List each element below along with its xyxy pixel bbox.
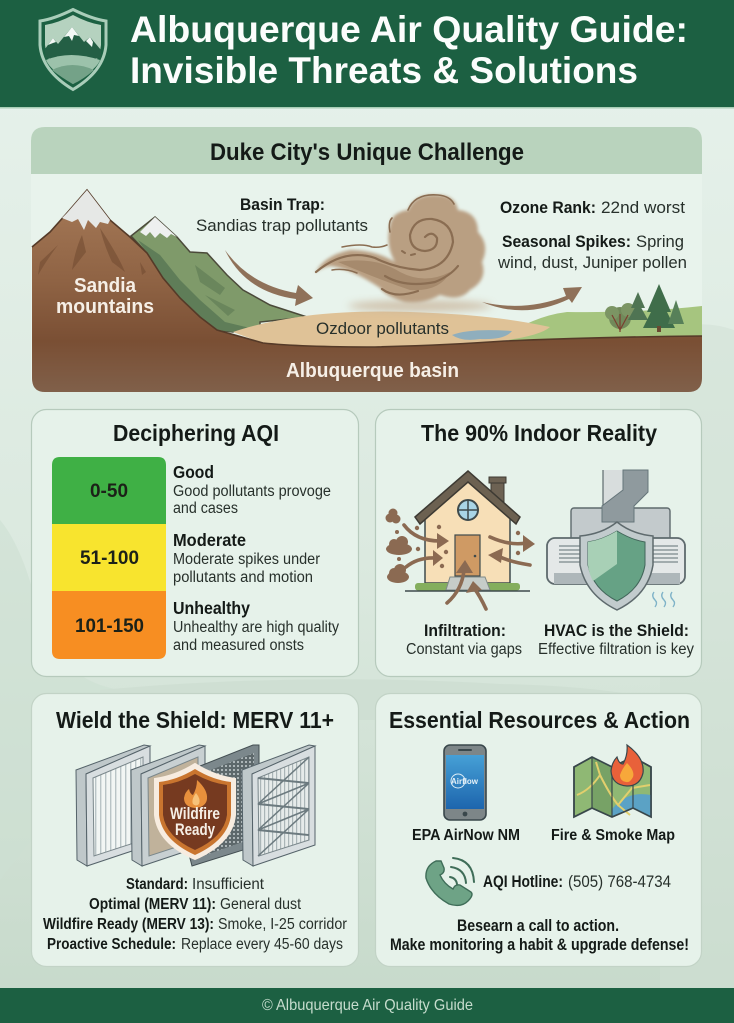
AQI description: Unhealthy: and measured onsts xyxy=(173,637,304,654)
icon: dust cloud xyxy=(315,195,492,312)
AQI description: Good: Good xyxy=(173,462,214,482)
icon: phone with AirNow: Airflow xyxy=(451,777,479,786)
caption: Infiltration: Constant via gaps xyxy=(406,641,522,658)
panel: Deciphering AQI xyxy=(32,410,358,676)
heading: Duke City's Unique Challenge: Duke City's Unique Challenge xyxy=(210,139,524,166)
caption: HVAC is the Shield xyxy=(538,621,694,658)
text: call to action xyxy=(390,917,689,954)
filter: lattice frame xyxy=(242,745,315,866)
heading: Deciphering AQI: Deciphering AQI xyxy=(113,420,279,446)
label: Fire & Smoke Map: Fire & Smoke Map xyxy=(551,827,675,844)
panel: Duke City's unique challenge xyxy=(31,127,702,392)
icon: fire and smoke map xyxy=(574,745,651,817)
badge: Wildfire Ready shield xyxy=(155,764,235,859)
AQI description: Moderate xyxy=(173,530,320,586)
AQI description: Good xyxy=(173,462,331,517)
label: Sandia mountains: mountains xyxy=(56,296,154,318)
list: filter ratings: Insufficient xyxy=(192,876,265,893)
filter: carbon mesh xyxy=(186,745,259,866)
AQI scale bar: 101-150 xyxy=(75,616,144,637)
text: Ozone Rank and Seasonal Spikes: wind, dust, Juniper pollen xyxy=(497,253,687,272)
AQI description: Good: Good pollutants provoge xyxy=(173,483,331,500)
caption: HVAC is the Shield: Effective filtration is key xyxy=(538,641,694,658)
list: filter ratings: Standard: xyxy=(126,876,188,893)
label: Ozdoor pollutants: Ozdoor pollutants xyxy=(316,319,449,338)
illustration: four air filters xyxy=(76,745,315,866)
icon: phone with AirNow xyxy=(444,745,486,820)
text: Ozone Rank and Seasonal Spikes: Spring xyxy=(636,232,684,251)
list: filter ratings: Proactive Schedule: xyxy=(47,936,176,953)
panel: 90% indoor reality xyxy=(376,410,702,676)
caption: Infiltration xyxy=(406,621,522,658)
list: filter ratings xyxy=(43,876,347,953)
text: call to action: Make monitoring a habit & upgrade defense! xyxy=(390,936,689,954)
label: Albuquerque basin: Albuquerque basin xyxy=(286,360,459,382)
caption: HVAC is the Shield: HVAC is the Shield: xyxy=(544,621,689,640)
title: Invisible Threats & Solutions xyxy=(130,50,638,91)
icon: telephone with signal xyxy=(426,858,474,905)
heading: Essential Resources & Action: Essential Resources & Action xyxy=(389,707,690,733)
list: filter ratings: Smoke, I-25 corridor xyxy=(218,916,347,933)
footer xyxy=(0,988,734,1023)
footer: © Albuquerque Air Quality Guide xyxy=(262,997,473,1014)
AQI scale bar: 0-50 xyxy=(90,481,128,502)
AQI description: Moderate: Moderate xyxy=(173,530,246,550)
header band xyxy=(0,0,734,108)
title: Albuquerque Air Quality Guide: xyxy=(130,9,688,50)
icon: leaky house xyxy=(386,471,535,609)
AQI description: Good: and cases xyxy=(173,500,238,517)
list: filter ratings: Optimal (MERV 11): xyxy=(89,896,216,913)
arrow: into basin xyxy=(225,250,313,306)
arrow: outflow right xyxy=(482,287,582,310)
icon: HVAC unit with shield xyxy=(547,470,685,610)
text: Basin Trap: Sandias trap pollutants xyxy=(196,216,368,235)
text: AQI Hotline: AQI Hotline: xyxy=(483,873,563,891)
panel: Wield the Shield xyxy=(32,694,358,966)
heading: The 90% Indoor Reality: The 90% Indoor Reality xyxy=(421,420,657,446)
AQI description: Unhealthy: Unhealthy are high quality xyxy=(173,619,339,636)
text: Ozone Rank and Seasonal Spikes xyxy=(497,198,687,272)
AQI description: Moderate: Moderate spikes under xyxy=(173,551,320,568)
caption: Infiltration: Infiltration: xyxy=(424,621,506,640)
title xyxy=(130,9,688,91)
text: Ozone Rank and Seasonal Spikes: Ozone Rank: xyxy=(500,198,596,217)
list: filter ratings: Wildfire Ready (MERV 13): xyxy=(43,916,214,933)
text: AQI Hotline: (505) 768-4734 xyxy=(568,873,671,891)
label: EPA AirNow NM: EPA AirNow NM xyxy=(412,827,520,844)
icon: mountain shield logo xyxy=(40,10,106,90)
label: Sandia mountains xyxy=(56,275,154,318)
illustration: basin landscape xyxy=(32,190,702,392)
badge: Wildfire Ready shield: Ready xyxy=(175,821,216,839)
badge: Wildfire Ready shield: Wildfire xyxy=(170,805,220,823)
text: Basin Trap xyxy=(196,195,368,235)
AQI description: Moderate: pollutants and motion xyxy=(173,569,313,586)
heading: Wield the Shield MERV 11+: Wield the Shield: MERV 11+ xyxy=(56,707,334,733)
filter: standard pleated xyxy=(76,745,150,866)
text: Basin Trap: Basin Trap: xyxy=(240,195,325,214)
panel: Essential resources xyxy=(376,694,702,966)
label: Sandia mountains: Sandia xyxy=(74,275,137,297)
icon: trees and bush xyxy=(605,284,684,332)
filter: dusty media xyxy=(131,745,205,866)
AQI description: Unhealthy: Unhealthy xyxy=(173,598,250,618)
list: filter ratings: Replace every 45-60 days xyxy=(181,936,343,953)
text: Ozone Rank and Seasonal Spikes: 22nd worst xyxy=(601,198,685,217)
list: filter ratings: General dust xyxy=(220,896,302,913)
text: call to action: Besearn a call to action. xyxy=(457,917,619,935)
AQI scale bar: 51-100 xyxy=(80,548,139,569)
AQI description: Unhealthy xyxy=(173,598,339,654)
AQI scale bar xyxy=(52,457,166,659)
text: Ozone Rank and Seasonal Spikes: Seasonal Spikes: xyxy=(502,232,631,251)
text: AQI Hotline xyxy=(483,873,671,891)
